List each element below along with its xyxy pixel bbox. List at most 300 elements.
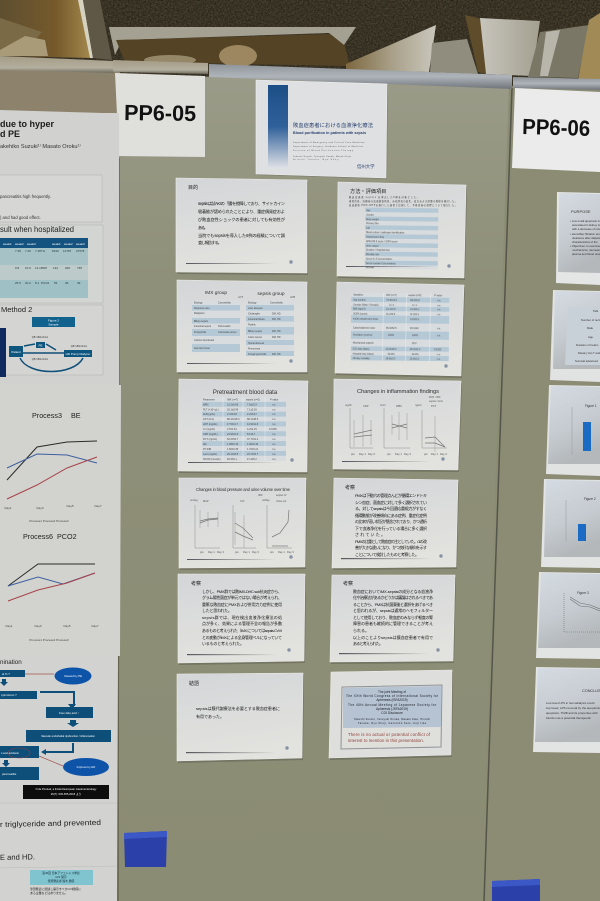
axis labels: pre <box>424 452 428 456</box>
table: Variables <box>353 294 364 297</box>
table: HCO3 (mmol/L) <box>203 458 221 461</box>
flowchart: Improve by HD <box>77 765 95 769</box>
chart: CRP <box>350 408 373 448</box>
table: 2.5±1.64 <box>227 428 237 431</box>
body text: 以上のことよりsepsisは膜血症患者で有用で <box>353 634 433 640</box>
axis labels: pre <box>351 452 355 456</box>
meeting text: Apheresis (JSFA2019) <box>376 707 408 711</box>
chart: Process6 PCO2: PCO2 <box>57 532 77 541</box>
table: IMX group: IMX group <box>205 290 227 296</box>
table: BMI (kg/m²) <box>353 308 366 311</box>
contact box: ある企業などはありません。 <box>30 890 68 895</box>
panel: 考察 1 <box>332 478 459 570</box>
panel: left poster process charts <box>0 385 121 656</box>
table: CRP (mg/dL) <box>203 433 218 436</box>
intro text: 血液透析 PMX-DHPを施行した患者と比較して、予後改善の指標について検討した。 <box>349 203 457 207</box>
body text: 循環動態が改善傾向にある症例、重症化症例 <box>355 512 427 518</box>
title text: Blood purification in patients with sepsis <box>293 131 366 135</box>
axis labels: WBC <box>396 404 402 408</box>
footer line and logo <box>339 648 440 654</box>
title text: 信州大学 <box>357 163 375 170</box>
table: 18.3±6.1 <box>227 458 237 461</box>
axis labels: CRP <box>363 404 369 408</box>
heading: Pretreatment blood data <box>213 390 278 396</box>
table: sepsis group: Pyelitis <box>248 324 256 326</box>
flowchart: pancreatitis <box>2 772 17 776</box>
table: n.s. <box>437 334 441 337</box>
table: 60.0% <box>388 353 395 356</box>
conclusion text <box>0 803 117 868</box>
table: IMX group: Ruptured ulcer <box>194 307 210 310</box>
body text: されていた。 <box>355 531 385 537</box>
conclusion text: r triglyceride and prevented <box>0 818 101 829</box>
flowchart: Cleared by PE <box>64 674 82 678</box>
table: sepsis group: Biliary sepsis <box>248 330 263 333</box>
table: PCT (ng/mL) <box>203 438 217 441</box>
table: 1.90±0.40 <box>247 443 259 446</box>
table: Mechanical support <box>353 342 374 345</box>
panel: right poster conclusion: function as a potential therapeutic <box>546 716 591 720</box>
body text: sepsis群では、現在検出血液浄化療法の処 <box>202 614 282 620</box>
table: n.s. <box>272 408 276 412</box>
flowchart: 26(7): 645-655,2018 より <box>51 792 82 796</box>
blue tray right <box>492 879 540 901</box>
table: 4 / 1 <box>412 304 418 307</box>
flowchart: N de Pontual, a limited European Gastroenterology <box>36 787 97 791</box>
body text: 有用であった。 <box>196 713 224 719</box>
body text: ることから、PMXは抗菌薬後と選択をあげるべき <box>353 601 433 607</box>
chart: Process6 PCO2: Day7 <box>91 624 99 628</box>
title text: 敗血症患者における血液浄化療法 <box>293 121 374 129</box>
table: Duration / Hospital stay <box>366 249 391 252</box>
axis labels <box>345 403 447 456</box>
table: Serum Lactate Concentration <box>366 262 396 265</box>
body text: 吸着能が認められたことにより、重症偶発症およ <box>198 208 285 215</box>
title text: Division of Blood Purification Therapy <box>293 149 354 152</box>
panel: right poster figure 2 <box>541 479 600 568</box>
chart: Cytokine <box>422 410 447 452</box>
meeting text <box>346 690 439 725</box>
table: Cr (mg/dL) <box>203 428 215 431</box>
table: n.s. <box>272 418 276 421</box>
table: 14.9±12.8 <box>247 423 259 426</box>
table: 11.0±2.1 <box>410 313 420 316</box>
table: ALB (g/dL) <box>203 413 215 416</box>
panel: 考察 2 <box>178 574 306 665</box>
results table: 25.5 <box>15 281 21 285</box>
results table: 9.8 <box>15 266 20 270</box>
footer line and logo <box>188 458 294 463</box>
table: 37.7±31.4 <box>247 438 259 441</box>
legend: sepsis / Cont <box>429 400 443 403</box>
title text: Department of Emergency and Critical Care Medicine, <box>293 141 365 144</box>
body text: 障害の患者も継続的に管理できることが考え <box>353 620 433 626</box>
table: 24.0±18.3 <box>386 348 397 351</box>
table: 24.7±15.7 <box>247 453 259 456</box>
conclusion text: E and HD. <box>0 852 35 862</box>
table: sepsis group <box>246 291 295 356</box>
label: PP6-06: PP6-06 <box>522 114 591 141</box>
panel: right poster purpose <box>556 192 600 285</box>
table: n.s. <box>437 358 441 361</box>
chart: Process3 BE: Day3 <box>36 506 44 510</box>
contact box: COI 開示 <box>55 875 67 879</box>
table: sepsis group: Spinal abscess <box>248 342 265 345</box>
table: IMX group: Etiology <box>194 302 203 304</box>
table: Vasopressor drug <box>366 236 385 239</box>
chart: Process6 PCO2: Process1 Process2 Process3 <box>29 638 69 642</box>
table: n.s. <box>272 413 276 416</box>
heading: 考察 <box>345 484 355 491</box>
table: n.s. <box>437 313 441 316</box>
panel: right poster purpose: • Hemofilter filtration and <box>570 232 600 236</box>
axis labels: mmHg <box>190 498 198 502</box>
objective box <box>0 175 102 222</box>
chart: Process3 BE: Process3 <box>32 411 62 420</box>
flowchart: cylomicron ? <box>1 693 17 697</box>
axis labels: sepsis IV <box>276 493 287 497</box>
table: 0.6135 <box>434 348 442 351</box>
table: n.s. <box>437 327 441 330</box>
table: Parameter <box>203 398 215 402</box>
table: n.s. <box>272 448 276 451</box>
flowchart <box>0 668 111 799</box>
table: n.s. <box>272 423 276 426</box>
method 2 diagram: Sample <box>48 322 59 326</box>
results table: 39 <box>77 281 81 285</box>
table: n.s. <box>437 299 441 302</box>
poster title: akehiko Suzuki¹⁾ Masato Oroku¹⁾ <box>0 143 81 150</box>
chart: urine volume <box>267 505 292 548</box>
table: sepsis group: Cholangitis <box>248 312 261 316</box>
panel: joint meeting COI <box>329 670 453 760</box>
results table: 27678 <box>76 249 85 253</box>
body text: いるものと考えられた。 <box>202 640 244 646</box>
meeting text: The joint Meeting of <box>378 690 406 694</box>
flowchart: al % ? <box>2 672 10 676</box>
legend: PMX / IMX <box>429 396 441 399</box>
table: Urine output <box>366 244 379 248</box>
axis labels: mg/dl <box>345 403 352 407</box>
table: IMX group: Malignant <box>194 312 205 315</box>
axis labels: ng/ml <box>415 403 422 407</box>
panel: left poster examination flowchart: nination <box>0 659 22 666</box>
table: Survival <box>366 266 374 269</box>
meeting text: Takeshi Suzuki, Yasuyuki Onoda, Masaki Kato, Hiroshi <box>354 718 430 721</box>
table: 2.3±0.48 <box>227 413 237 416</box>
bar chart <box>572 407 591 455</box>
results table: 20.0 <box>25 281 31 285</box>
table: Catecholamine index <box>353 327 376 330</box>
axis labels: pre <box>200 550 204 554</box>
title text: Takeshi Suzuki, Yasuyuki Onoda, Masaki Kato <box>293 155 352 158</box>
body text <box>353 588 433 646</box>
table: 7.1±5.39 <box>247 408 257 412</box>
axis labels: Day 3 <box>252 550 259 554</box>
table: n.s. <box>272 438 276 441</box>
panel: right poster table: Duration of treatm <box>576 343 599 347</box>
results table: week2 <box>64 242 73 246</box>
panel: right poster conclusion: Low level LPS in hemodialysis could <box>546 701 595 705</box>
table: IMX group: n=7 <box>238 295 243 299</box>
table: P value <box>270 398 279 402</box>
axis labels: MAP <box>203 499 209 503</box>
results table: 200 <box>65 266 70 270</box>
results table: week3 <box>27 242 36 246</box>
heading: 方法・評価項目 <box>350 187 386 195</box>
panel: right poster purpose: plasma and blood urea <box>572 252 600 256</box>
table: sepsis group: Liver abscess <box>248 307 263 310</box>
table: n.s. <box>272 443 276 446</box>
table: 25.0 <box>412 342 417 345</box>
background: rock wall above the board <box>0 0 600 90</box>
table: sepsis group: DM, HD <box>272 312 281 316</box>
table: sepsis group: sepsis group <box>257 291 285 297</box>
chart: Process3 BE: BE <box>71 411 81 420</box>
table: Age (years) <box>353 299 366 302</box>
table: 0.0135 <box>269 428 277 431</box>
table: IMX group: Colonic diverticular <box>194 339 214 342</box>
body text: 重篤な敗血症にPMXおよび併用力カ症例に使用 <box>202 601 282 607</box>
results table: week1 <box>52 242 61 246</box>
table: IMX group: Perityphlitis <box>194 331 207 334</box>
objective box: ) and had good effect. <box>0 215 41 220</box>
footer line and logo <box>187 359 293 364</box>
axis labels: /mm³ <box>380 403 386 407</box>
table: Lact (mg/dL) <box>203 453 217 456</box>
table: 18.1±8.99 <box>227 408 239 412</box>
body text: PMXの比重として敗血症の主としていた。CIの改 <box>355 538 427 544</box>
body text: 化や治療法があるかどうかは議論はされるべきであ <box>353 594 433 600</box>
panel: right poster purpose: • Low small apoptosis is <box>570 219 600 223</box>
panel: title page <box>256 80 388 179</box>
chart: Process6 PCO2 <box>5 532 99 642</box>
table: IMX group: Necrotic bowel <box>194 347 210 350</box>
axis labels: Day 3 <box>440 452 447 456</box>
intro text <box>349 195 457 207</box>
results table: week2 <box>15 242 24 246</box>
table: Lab <box>366 228 371 230</box>
body text: グラム陽性菌症が単元ではない場合が考えられ、 <box>202 594 282 600</box>
table: SOFA (score) <box>353 313 368 316</box>
table: IMX group: Intestinal sepsis <box>194 325 212 328</box>
table: sepsis group: Colon cancer <box>248 336 262 339</box>
table: 86.4±128.3 <box>227 418 240 421</box>
panel: right poster purpose: characteristics of the <box>572 240 598 244</box>
table: IMX (n=7) <box>386 294 397 297</box>
body text: ことについて検討したものと考察した。 <box>355 551 419 557</box>
table: APACHE II score / SOFA score <box>366 240 398 243</box>
chart: Process3 BE <box>4 411 102 523</box>
table: Ventilator (yes/no) <box>353 334 372 337</box>
body text: あると考えられた。 <box>353 640 383 646</box>
method 2 diagram: PE <box>38 344 43 348</box>
body text: しかし、PMX群では敗IMX-DHC sub抗炎症から、 <box>202 588 282 594</box>
table: IMX group: Pancreatitis <box>218 325 231 328</box>
panel: 結語 <box>177 673 304 763</box>
body text: 点が多く、効果による管理不全の報告が多数 <box>202 620 282 626</box>
heading: Changes in blood pressure and urine volume over time <box>196 487 291 492</box>
table: Gender <box>366 214 374 217</box>
chart: Process6 PCO2: Process6 <box>23 532 53 541</box>
blue tray left <box>124 831 167 867</box>
table: n.s. <box>437 308 441 311</box>
table: IMX group: Biliary sepsis <box>194 320 209 323</box>
table: Hospital stay (days) <box>353 353 374 356</box>
body text <box>196 705 280 719</box>
results table: week3 <box>76 242 85 246</box>
table: Primary Site <box>366 222 379 225</box>
table: 100% <box>388 334 395 337</box>
label: PP6-05 <box>115 73 205 157</box>
results table: 8.1 <box>35 281 40 285</box>
table: 26.0±21.2 <box>410 348 421 351</box>
footer line and logo <box>187 648 291 655</box>
body text: と思われるが、sepsisは通常のヘモフィルター <box>353 607 433 613</box>
axis labels: Urine vol <box>276 499 287 503</box>
results table: 7.38 <box>15 249 21 253</box>
contact box: 第40回 日本アフェレシス学会 <box>42 871 80 875</box>
results table: 7.38 <box>35 249 41 253</box>
body text: として使用しており、敗血症のみならず軽度の腎 <box>353 614 433 620</box>
table: WBC <box>203 404 209 406</box>
table: 2.2±0.47 <box>247 413 257 416</box>
results table: 7.29 <box>25 249 31 253</box>
axis labels: Day 1 <box>431 452 438 456</box>
body text <box>355 492 427 557</box>
footer line and logo <box>186 746 289 753</box>
table: 1.47±0.21 <box>247 448 259 451</box>
intro text: 患者背景、治療前の血液検査所見、炎症所見の変化、血圧および尿量の推移を検討した。 <box>349 199 457 203</box>
axis labels: Day 1 <box>208 550 215 554</box>
table: sepsis group: Etiology <box>248 302 257 304</box>
panel: 方法・評価項目 <box>337 182 467 280</box>
table: Gender (Male / Female) <box>353 304 379 307</box>
table: 100% <box>412 334 419 337</box>
axis labels: Day 3 <box>368 452 375 456</box>
table <box>365 208 438 270</box>
chart: Process6 PCO2: Day3 <box>34 624 42 628</box>
axis labels: Day 1 <box>395 452 402 456</box>
heading: 目的 <box>188 184 198 191</box>
table: 1.50±0.35 <box>227 448 239 451</box>
panel: right poster purpose: clearance after dialysis <box>572 236 600 240</box>
table: sepsis group: Comorbidity <box>270 302 284 304</box>
results table <box>0 225 103 303</box>
right board panel <box>481 86 600 901</box>
footer line and logo <box>444 364 448 368</box>
table: n.s. <box>272 453 276 456</box>
meeting text: The 40th Annual Meeting of Japanese Society for <box>348 703 437 707</box>
axis labels: pre <box>235 550 239 554</box>
body text: 下で血液浄化を行っている場合に多く選択 <box>355 525 427 531</box>
meeting text: Apheresis (ISFA2019) <box>376 698 408 702</box>
flowchart: Free fatty acid ↑ <box>59 711 80 715</box>
table: n.s. <box>272 458 276 461</box>
table: 17.5±11.7 <box>227 423 239 426</box>
top metal rails <box>0 56 600 90</box>
legend <box>429 396 443 403</box>
panel: right poster conclusion: apoptosis, Th2B and its properties with <box>546 711 598 715</box>
table: 21.1±3.9 <box>386 308 396 311</box>
table <box>351 293 449 361</box>
meeting text: Tanaka, Ryo Shoji, Kazuhiko Sato, Koji Iida <box>358 722 427 725</box>
table: 7.8±10.9 <box>247 404 257 406</box>
table: n.s. <box>272 404 276 406</box>
body text: られる。 <box>353 627 369 633</box>
axis labels: Day 1 <box>278 550 285 554</box>
method 2 diagram: QB 180ml/min <box>71 344 88 348</box>
chart: Process3 BE: Day5 <box>66 504 74 508</box>
table: n.s. <box>437 304 441 307</box>
line chart <box>564 593 600 632</box>
table: 17.4±5.2 <box>247 458 257 461</box>
table: 24.9±10.9 <box>227 433 239 436</box>
chart: Process3 BE: Process1 Process2 Process3 <box>29 519 69 523</box>
panel: right poster table: Age <box>588 335 593 339</box>
panel: Pretreatment blood data <box>178 379 309 474</box>
panel: Changes in inflammation findings <box>333 379 462 472</box>
panel: 考察 3 <box>330 575 456 664</box>
title text: Hiroshi Tanaka, Ryo Shoji <box>293 158 340 161</box>
center board panel <box>117 74 512 901</box>
table: 68.1±48.5 <box>247 418 259 421</box>
results table: PCO2 <box>41 281 50 285</box>
method 2 diagram: Figure 2 <box>48 318 59 322</box>
panel: right poster table: Male <box>587 326 594 330</box>
chart: MAP <box>195 505 220 548</box>
table: Age <box>366 209 371 212</box>
meeting text: The XXth World Congress of International Society for <box>346 694 439 698</box>
panel: left poster examination flowchart <box>0 655 118 901</box>
body text: sepsisは膜代謝療法を必要とする敗血症患者に <box>196 705 280 711</box>
footer line and logo <box>342 457 445 462</box>
body text <box>202 588 282 646</box>
axis labels: pre <box>387 452 391 456</box>
results table: 8190 <box>52 249 59 253</box>
heading: 考察 <box>343 580 353 587</box>
table: 70.5±13.6 <box>386 299 398 302</box>
footer line and logo <box>346 264 451 268</box>
table: 21.8±4.1 <box>410 308 420 311</box>
table <box>202 397 286 461</box>
footer line and logo <box>187 555 293 560</box>
table: 8.1±4.7 <box>247 433 256 436</box>
panel: right poster figure 1 <box>546 385 600 476</box>
results table: 14.1 <box>35 266 41 270</box>
chart: Process3 BE: Day1 <box>4 506 12 510</box>
table: PT-INR <box>203 448 211 451</box>
table: sepsis group: Intestinal fistula <box>248 318 265 321</box>
body text <box>198 200 286 246</box>
table: sepsis group: Pneumonia <box>248 348 261 350</box>
body text: したと思われた。 <box>202 607 232 613</box>
table: Initial vasopressor dose <box>353 318 379 321</box>
table: Serum IL-6 Concentration <box>366 258 393 261</box>
table: sepsis group: DM, HD <box>272 318 281 321</box>
body text: シン血症、菌血症に対して多く選択されてい <box>355 499 427 505</box>
body text: PMXは下動穴の管理点んどが循環エンドトキ <box>355 492 427 498</box>
body text: 当院でもsepsisを導入した6例の経験について調 <box>198 232 285 239</box>
title text: Department of Surgery, Graduate School of Medicine <box>293 145 364 148</box>
contact box: 筆頭発表者 鈴木 慶郎 <box>48 879 75 883</box>
chart: Process3 BE: Day7 <box>94 504 102 508</box>
table: Body weight <box>366 218 379 221</box>
COI statement: There is no actual or potential conflict of <box>348 732 431 737</box>
results table: 36 <box>65 281 69 285</box>
panel: right poster table <box>550 290 600 382</box>
axis labels: pre <box>270 550 274 554</box>
